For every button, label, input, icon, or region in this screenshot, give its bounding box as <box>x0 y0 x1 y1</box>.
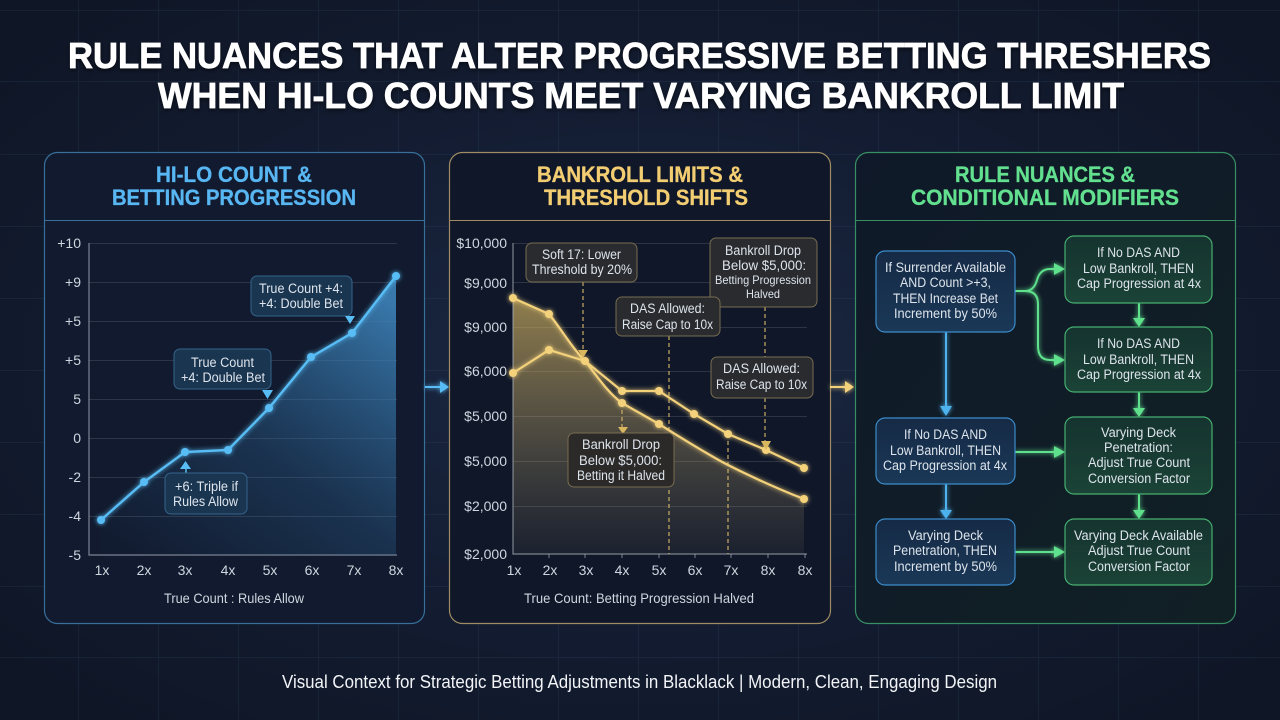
x axis labels: 5x <box>263 562 277 578</box>
rule box: surrender: THEN Increase Bet <box>893 291 998 306</box>
x axis labels: 2x <box>543 562 557 578</box>
callout: soft 17: Soft 17: Lower <box>542 247 621 262</box>
rule box: no das low bankroll left: Cap Progression at 4x <box>883 458 1007 473</box>
title: RULE NUANCES THAT ALTER PROGRESSIVE BETTING THRESHERS <box>68 35 1211 76</box>
y axis labels: $9,000 <box>464 319 507 335</box>
x axis labels: 4x <box>221 562 235 578</box>
callout: bankroll drop upper <box>710 238 817 307</box>
arrow: panel one to panel two <box>425 381 449 393</box>
panel: bankroll limits and threshold shifts <box>450 152 830 624</box>
title: WHEN HI-LO COUNTS MEET VARYING BANKROLL LIMIT <box>158 75 1124 116</box>
footer caption: Visual Context for Strategic Betting Adjustments in Blacklack | Modern, Clean, Engaging Design <box>282 672 997 692</box>
callout: bankroll drop upper: Bankroll Drop <box>725 243 801 258</box>
x axis labels: 6x <box>305 562 319 578</box>
panel: rule nuances and conditional modifiers <box>856 152 1236 624</box>
x axis labels: 7x <box>724 562 738 578</box>
x axis labels: 3x <box>178 562 192 578</box>
panel heading: hi-lo: HI-LO COUNT & <box>156 162 312 187</box>
callout: true count double bet upper: +4: Double Bet <box>259 296 343 311</box>
y axis labels <box>57 235 81 563</box>
panel heading: hi-lo: BETTING PROGRESSION <box>112 185 356 210</box>
panel heading: rule nuances <box>911 162 1179 210</box>
panel heading: bankroll: THRESHOLD SHIFTS <box>544 185 748 210</box>
rule box: no das low bankroll right second <box>1065 327 1212 392</box>
rule box: no das low bankroll left <box>876 418 1015 484</box>
rule box: no das low bankroll left: Low Bankroll, THEN <box>890 443 1001 458</box>
x axis labels: 1x <box>507 562 521 578</box>
y axis labels: 5 <box>73 391 81 407</box>
connector arrows: blue <box>940 332 952 519</box>
y axis labels: $5,000 <box>464 453 507 469</box>
y axis labels: $6,000 <box>464 363 507 379</box>
callout: true count double bet lower <box>174 349 273 399</box>
rule box: no das low bankroll left: If No DAS AND <box>904 427 987 442</box>
callout: triple if rules allow: Rules Allow <box>173 494 238 509</box>
y axis labels: $10,000 <box>456 235 507 251</box>
y axis labels: 0 <box>73 430 81 446</box>
callout: das allowed lower <box>711 357 813 398</box>
callout: true count double bet lower: +4: Double Bet <box>181 370 265 385</box>
y axis labels: $2,000 <box>464 546 507 562</box>
rule box: deck available right <box>1065 519 1212 585</box>
rule box: no das low bankroll right second: Low Bankroll, THEN <box>1083 352 1194 367</box>
y axis labels: +5 <box>65 313 81 329</box>
connector arrows: green <box>1015 263 1145 558</box>
y axis labels: +9 <box>65 274 81 290</box>
rule box: deck penetration left: Increment by 50% <box>894 559 997 574</box>
callout: bankroll drop upper: Below $5,000: <box>722 258 806 273</box>
rule box: deck penetration left: Penetration, THEN <box>893 543 997 558</box>
rule box: surrender: AND Count >+3, <box>900 275 991 290</box>
y axis labels: $2,000 <box>464 498 507 514</box>
x axis labels: 3x <box>579 562 593 578</box>
rule box: surrender: If Surrender Available <box>885 260 1006 275</box>
rule box: deck penetration left <box>876 519 1015 585</box>
y axis labels: $5,000 <box>464 408 507 424</box>
callout: true count double bet upper: True Count +4: <box>259 281 343 296</box>
panel heading: hi-lo <box>112 162 356 210</box>
axis title: True Count: Betting Progression Halved <box>524 590 754 606</box>
callout: das allowed upper <box>616 297 720 336</box>
callout: true count double bet upper <box>251 276 355 324</box>
callout: bankroll drop lower <box>568 433 674 487</box>
panel heading: bankroll: BANKROLL LIMITS & <box>537 162 743 187</box>
rule box: no das low bankroll right second: If No DAS AND <box>1097 336 1180 351</box>
panel heading: rule nuances: RULE NUANCES & <box>955 162 1135 187</box>
y axis labels: -2 <box>69 469 81 485</box>
x axis labels: 1x <box>95 562 109 578</box>
rule box: no das low bankroll right top: Cap Progression at 4x <box>1077 276 1201 291</box>
x axis labels: 2x <box>137 562 151 578</box>
line chart: true count progression <box>57 235 403 606</box>
y axis labels <box>456 235 507 562</box>
callout: bankroll drop lower: Below $5,000: <box>579 453 662 468</box>
callout: bankroll drop upper: Betting Progression <box>715 273 811 287</box>
rule box: no das low bankroll right top: If No DAS AND <box>1097 245 1180 260</box>
callout: das allowed lower: DAS Allowed: <box>723 361 800 376</box>
rule box: deck penetration right: Penetration: <box>1104 440 1173 455</box>
rule box: deck penetration left: Varying Deck <box>908 528 983 543</box>
callout: bankroll drop upper: Halved <box>746 287 780 301</box>
x axis labels: 8x <box>389 562 403 578</box>
rule box: no das low bankroll right top <box>1065 236 1212 303</box>
y axis labels: -5 <box>69 547 81 563</box>
rule box: surrender <box>876 251 1015 332</box>
rule box: no das low bankroll right top: Low Bankroll, THEN <box>1083 261 1194 276</box>
x axis labels <box>507 562 812 578</box>
callout: das allowed upper: DAS Allowed: <box>630 301 705 316</box>
panel heading: bankroll <box>537 162 748 210</box>
x axis labels: 8x <box>798 562 812 578</box>
callout: true count double bet lower: True Count <box>191 355 254 370</box>
x axis labels: 4x <box>615 562 629 578</box>
y axis labels: -4 <box>69 508 81 524</box>
y axis labels: +10 <box>57 235 81 251</box>
arrow: panel two to panel three <box>830 381 854 393</box>
title <box>68 35 1211 116</box>
callout: triple if rules allow <box>165 461 247 514</box>
callout: das allowed lower: Raise Cap to 10x <box>716 377 807 392</box>
x axis labels <box>95 562 403 578</box>
rule box: deck penetration right <box>1065 417 1212 494</box>
rule box: no das low bankroll right second: Cap Progression at 4x <box>1077 367 1201 382</box>
x axis labels: 8x <box>761 562 775 578</box>
rule box: deck available right: Conversion Factor <box>1088 559 1190 574</box>
y axis labels: +5 <box>65 352 81 368</box>
callout: das allowed upper: Raise Cap to 10x <box>622 317 713 332</box>
rule box: deck available right: Varying Deck Available <box>1074 528 1203 543</box>
callout: bankroll drop lower: Betting it Halved <box>577 468 665 483</box>
y axis labels: $9,000 <box>464 275 507 291</box>
line chart: bankroll thresholds <box>456 235 817 606</box>
x axis labels: 7x <box>347 562 361 578</box>
callout: soft 17: Threshold by 20% <box>532 262 632 277</box>
axis title: True Count : Rules Allow <box>164 590 305 606</box>
panel: hi-lo count and betting progression <box>44 152 424 624</box>
panel heading: rule nuances: CONDITIONAL MODIFIERS <box>911 185 1179 210</box>
rule box: surrender: Increment by 50% <box>894 306 997 321</box>
x axis labels: 5x <box>652 562 666 578</box>
rule box: deck penetration right: Adjust True Count <box>1088 455 1190 470</box>
callout: bankroll drop lower: Bankroll Drop <box>582 437 660 452</box>
rule box: deck available right: Adjust True Count <box>1088 543 1190 558</box>
rule box: deck penetration right: Conversion Factor <box>1088 471 1190 486</box>
callout: triple if rules allow: +6: Triple if <box>175 479 238 494</box>
rule box: deck penetration right: Varying Deck <box>1101 425 1176 440</box>
callout: soft 17 <box>526 243 637 282</box>
x axis labels: 6x <box>688 562 702 578</box>
